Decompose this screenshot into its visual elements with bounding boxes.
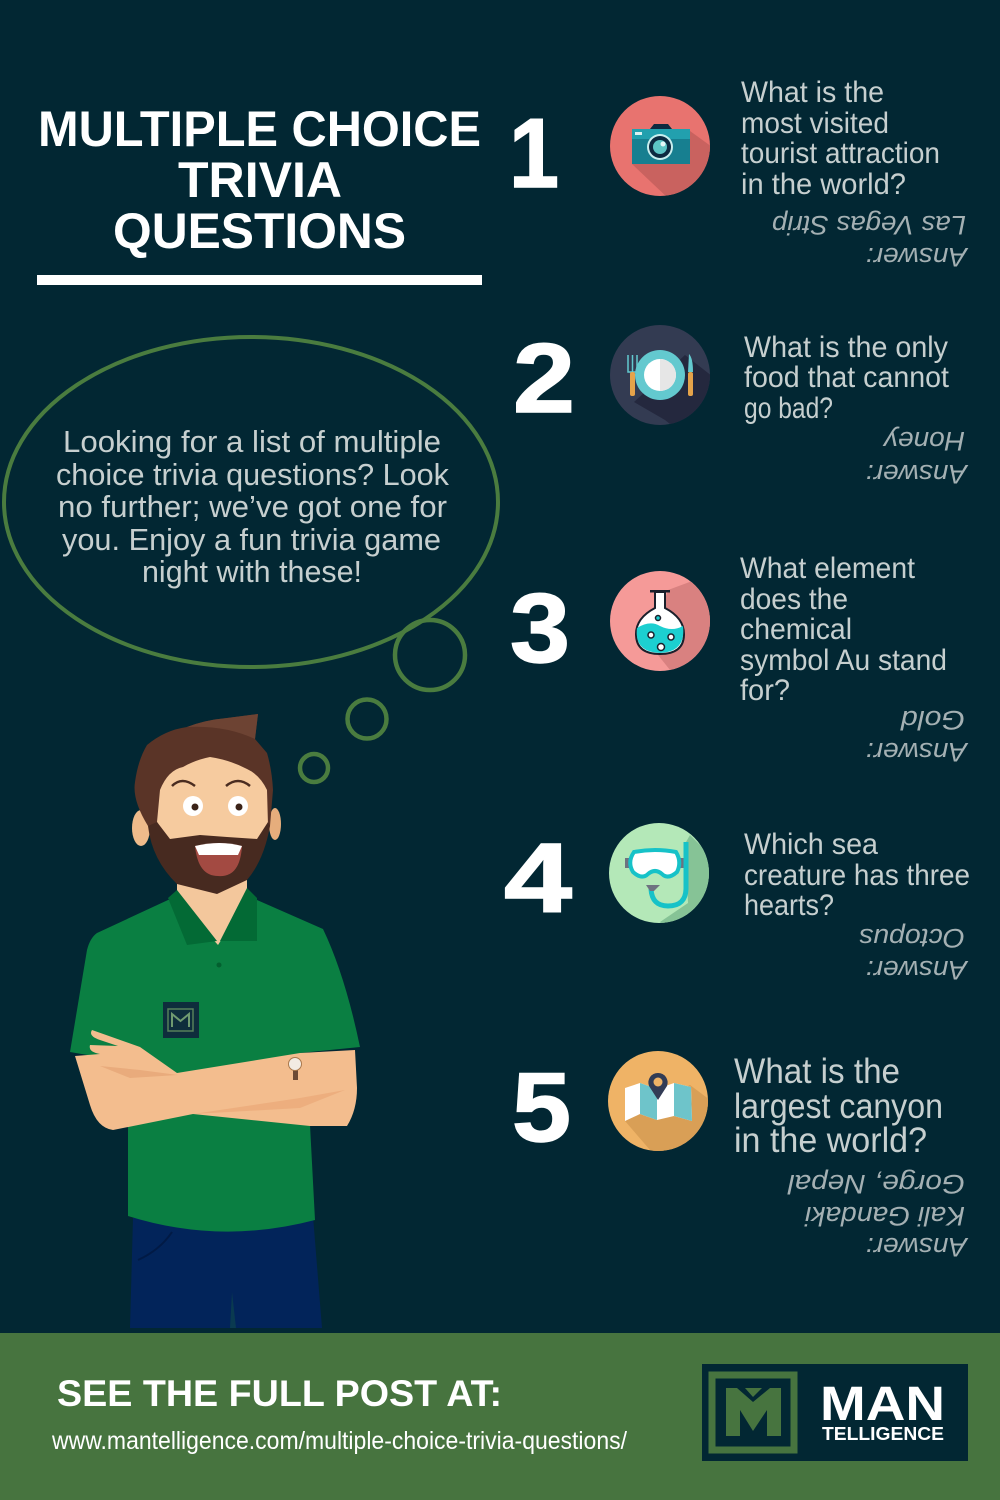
question 2: What is the only [744, 331, 948, 364]
question 3: for? [740, 674, 790, 707]
item 1 [509, 76, 969, 272]
item 3 [510, 552, 969, 767]
intro text: choice trivia questions? Look [56, 457, 449, 492]
question 4: hearts? [744, 889, 834, 922]
question 3: chemical [740, 613, 852, 646]
question 4: Which sea [744, 828, 878, 861]
crossed arms [75, 1030, 357, 1130]
number 1: 1 [509, 98, 559, 208]
upside-down answer 4 [859, 923, 969, 985]
number 3: 3 [510, 573, 570, 683]
intro text: no further; we’ve got one for [58, 489, 447, 524]
question 3: symbol Au stand [740, 644, 947, 677]
item 4 [504, 823, 970, 985]
upside-down answer 5 [787, 1169, 969, 1262]
title: TRIVIA [178, 152, 342, 208]
call to action: SEE THE FULL POST AT: [57, 1373, 502, 1414]
question 4 [744, 828, 970, 922]
footer band [0, 1333, 1000, 1500]
upside-down answer 2: Honey [882, 426, 965, 456]
question 1: tourist attraction [741, 137, 940, 170]
upside-down answer 3 [866, 705, 969, 767]
character: bearded man in green polo [70, 714, 360, 1328]
upside-down answer 2: Answer: [866, 459, 969, 489]
upside-down answer 5: Kali Gandaki [804, 1201, 965, 1231]
shirt logo badge [163, 1002, 199, 1038]
intro text: you. Enjoy a fun trivia game [62, 522, 441, 557]
logo: Mantelligence: MAN [820, 1378, 945, 1431]
thought bubble [4, 337, 498, 782]
head [132, 714, 281, 894]
question 1: in the world? [741, 168, 906, 201]
question 2: food that cannot [744, 361, 950, 394]
question 5: What is the [734, 1052, 900, 1091]
upside-down answer 3: Answer: [866, 737, 969, 767]
icon: folded map with pin [608, 1051, 708, 1151]
icon: plate and cutlery [610, 325, 710, 425]
icon: chemistry flask [610, 571, 710, 671]
number 4: 4 [504, 823, 572, 933]
upside-down answer 3: Gold [900, 705, 965, 735]
title [38, 101, 481, 259]
intro text: night with these! [142, 554, 362, 589]
upside-down answer 1: Las Vegas Strip [772, 210, 966, 240]
logo: Mantelligence [702, 1364, 968, 1461]
intro text [56, 424, 449, 589]
question 3: What element [740, 552, 916, 585]
question 1: What is the [741, 76, 884, 109]
upside-down answer 1 [772, 210, 969, 272]
logo: Mantelligence: TELLIGENCE [822, 1424, 944, 1444]
upside-down answer 4: Answer: [866, 955, 969, 985]
upside-down answer 5: Answer: [866, 1232, 969, 1262]
question 1 [741, 76, 940, 201]
question 1: most visited [741, 107, 889, 140]
title: MULTIPLE CHOICE [38, 101, 481, 157]
intro text: Looking for a list of multiple [63, 424, 441, 459]
question 5: largest canyon [734, 1087, 943, 1126]
question 3 [740, 552, 947, 707]
icon: wristwatch [288, 1058, 302, 1080]
icon: snorkel mask [609, 823, 709, 923]
upside-down answer 2 [866, 426, 969, 489]
post URL: www.mantelligence.com/multiple-choice-trivia-questions/ [51, 1427, 627, 1455]
number 5: 5 [512, 1052, 571, 1162]
question 4: creature has three [744, 859, 970, 892]
title: QUESTIONS [113, 203, 406, 259]
number 2: 2 [513, 323, 575, 433]
question 2 [744, 331, 950, 425]
upside-down answer 1: Answer: [866, 242, 969, 272]
question 3: does the [740, 583, 848, 616]
upside-down answer 4: Octopus [859, 923, 965, 953]
question 2: go bad? [744, 392, 833, 425]
question 5 [734, 1052, 943, 1160]
item 2 [513, 323, 969, 489]
question 5: in the world? [734, 1121, 927, 1160]
icon: camera [610, 96, 710, 196]
upside-down answer 5: Gorge, Nepal [787, 1169, 965, 1199]
item 5 [512, 1051, 969, 1262]
